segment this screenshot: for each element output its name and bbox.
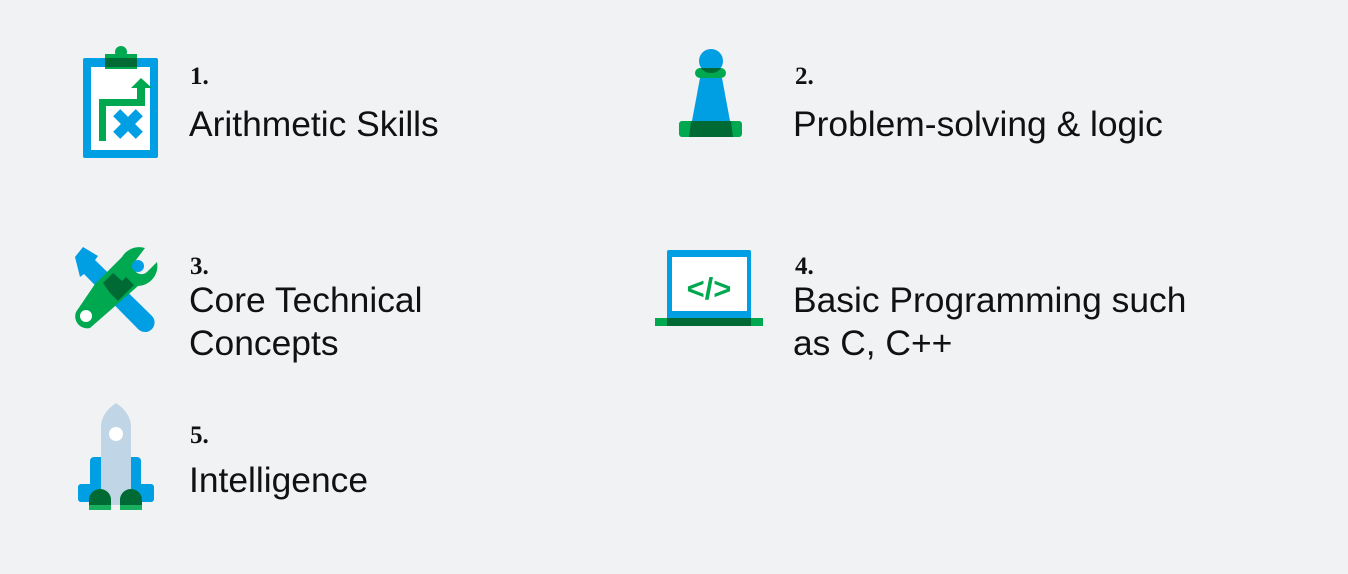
number 3: 3.	[190, 253, 209, 280]
label 4	[793, 280, 1186, 363]
number 2: 2.	[795, 63, 814, 90]
label 4: as C, C++	[793, 323, 952, 363]
label 3	[189, 280, 422, 363]
icon: laptop: </>	[687, 271, 731, 306]
label 1: Arithmetic Skills	[189, 104, 439, 144]
label 3: Concepts	[189, 323, 339, 363]
number 1: 1.	[190, 63, 209, 90]
label 2: Problem-solving & logic	[793, 104, 1163, 144]
label 4: Basic Programming such	[793, 280, 1186, 320]
label 3: Core Technical	[189, 280, 422, 320]
number 4: 4.	[795, 253, 814, 280]
label 5: Intelligence	[189, 460, 368, 500]
number 5: 5.	[190, 422, 209, 449]
